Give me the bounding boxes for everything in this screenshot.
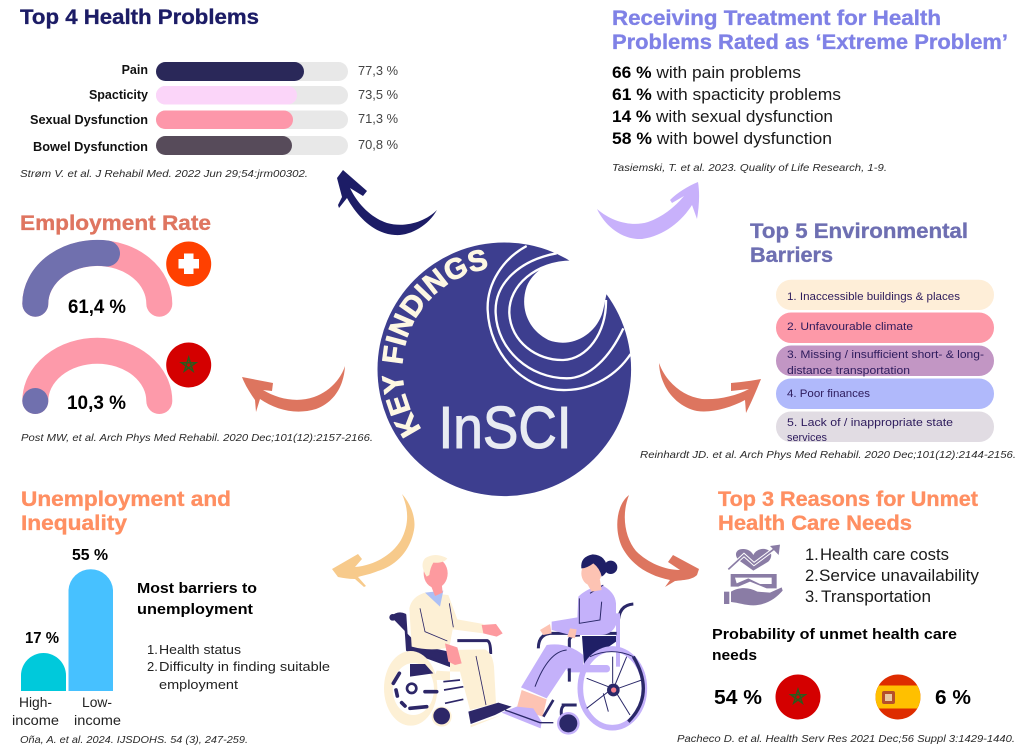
bar: bowel dysfunction [33,136,398,155]
reasons list: Health care costs [820,546,949,564]
heading line 2: Problems Rated as ‘Extreme Problem’ [612,30,1008,54]
axis label: high-income: High- [19,694,52,710]
arrow: lavender to treatment [597,182,699,239]
subheading: most barriers [137,580,257,618]
gauge: Morocco 10,3 % [22,351,159,414]
gauge: Switzerland 61,4 % [35,253,159,318]
citation: Ona: Oña, A. et al. 2024. IJSDOHS. 54 (3), 247-259. [20,734,248,746]
heading: top 4 health problems: Top 4 Health Problems [20,5,259,29]
barrier list: employment [159,677,238,692]
panel: employment rate [20,211,373,444]
reasons list: 2. [805,567,819,585]
woman in wheelchair [502,554,644,735]
barrier 4: 4. Poor finances [787,388,871,400]
bar chart: income [12,547,121,728]
treatment list [612,64,841,148]
citation: Pacheco: Pacheco D. et al. Health Serv Res 2021 Dec;56 Suppl 3:1429-1440. [677,733,1015,745]
barrier list: 2. [147,659,158,674]
barrier 3: distance transportation [787,365,910,377]
subheading: probability: Probability of unmet health care [712,627,957,643]
treatment list: 61 % with spacticity problems [612,86,841,104]
reasons list: Transportation [821,588,931,606]
heading line 2: Inequality [21,511,127,535]
barrier 3: 3. Missing / insufficient short- & long- [787,349,984,361]
panel: top 5 environmental barriers [640,219,1016,461]
axis label: high-income: income [12,712,59,728]
barrier list: Health status [159,642,242,657]
reasons list: 1. [805,546,819,564]
value: 17 %: 17 % [25,630,59,647]
barrier 2: 2. Unfavourable climate [787,321,913,333]
subheading: most barriers: unemployment [137,601,253,618]
barrier list: Difficulty in finding suitable [159,659,330,674]
citation: Post: Post MW, et al. Arch Phys Med Rehabil. 2020 Dec;101(12):2157-2166. [21,432,373,444]
panel: unmet health care needs [677,487,1015,745]
bar: bowel dysfunction: Bowel Dysfunction [33,140,148,154]
arrow: salmon to barriers [659,363,761,413]
axis label: low-income: Low- [82,694,112,710]
bar: high-income [21,653,66,691]
bar chart: health problems [30,62,398,155]
heading line 2: Barriers [750,243,833,267]
bar: sexual dysfunction: 71,3 % [358,112,398,126]
barrier list [147,642,330,692]
barrier 2 [776,312,994,343]
barrier 1 [776,280,994,310]
panel: unemployment and inequality [12,487,330,746]
reasons list: 3. [805,588,819,606]
reasons list: Service unavailability [819,567,980,585]
heading: receiving treatment: Receiving Treatment for Health [612,6,941,30]
bar: low-income [68,569,113,691]
barrier 4 [776,378,994,409]
logo disc [378,242,631,496]
arrow: salmon to unmet needs [617,495,699,587]
gauge: Morocco 10,3 %: 10,3 % [67,393,126,414]
bar: sexual dysfunction: Sexual Dysfunction [30,113,148,127]
bar: spacticity: 73,5 % [358,88,398,102]
icon: Swiss flag [166,242,211,286]
heading line 2: Health Care Needs [718,511,912,535]
heading: environmental barriers: Top 5 Environmental [750,219,968,243]
value: 55 %: 55 % [72,547,108,564]
bar: bowel dysfunction: 70,8 % [358,138,398,152]
curved text path [402,267,530,429]
central logo: InSCI key findings [378,242,632,496]
value: Morocco 54 %: 54 % [714,687,762,709]
logo swirl [488,243,633,390]
bar: spacticity: Spacticity [89,88,148,102]
icon: heart and hand with money [724,545,783,605]
citation: Tasiemski: Tasiemski, T. et al. 2023. Quality of Life Research, 1-9. [612,162,887,174]
barrier 5: 5. Lack of / inappropriate state [787,417,953,429]
barrier 3 [776,346,994,377]
gauge: Switzerland 61,4 %: 61,4 % [68,297,126,318]
icon: Spanish flag [876,674,920,720]
barrier 1: 1. Inaccessible buildings & places [787,291,961,303]
bar: pain: Pain [122,63,148,77]
citation: Strom: Strøm V. et al. J Rehabil Med. 2022 Jun 29;54:jrm00302. [20,168,308,180]
bar: spacticity [89,86,398,104]
arrow: navy to health problems [337,170,437,235]
man in wheelchair [384,555,512,727]
citation: Reinhardt: Reinhardt JD. et al. Arch Phys Med Rehabil. 2020 Dec;101(12):2144-2156. [640,449,1016,461]
axis label: low-income [74,694,121,728]
wordmark: InSCI: InSCI [438,395,572,461]
bar: pain [122,62,398,81]
heading: unemployment: Unemployment and [21,487,231,511]
reasons list [805,546,980,606]
axis label: low-income: income [74,712,121,728]
value: Spain 6 %: 6 % [935,687,971,709]
subheading: most barriers: Most barriers to [137,580,257,597]
curved label: key findings: KEY FINDINGS [382,250,488,438]
panel: receiving treatment [612,6,1008,174]
axis label: high-income [12,694,59,728]
arrow: orange to unemployment [332,494,414,587]
bar: sexual dysfunction [30,110,398,129]
illustration: two wheelchair users [384,554,644,735]
treatment list: 14 % with sexual dysfunction [612,108,833,126]
barrier 5 [776,412,994,444]
icon: Moroccan flag [776,674,820,720]
icon: Moroccan flag [166,342,211,388]
bar: pain: 77,3 % [358,64,398,78]
barrier 5: services [787,432,827,444]
panel: top 4 health problems [20,5,398,180]
arrow: salmon to employment [242,366,345,412]
heading: employment rate: Employment Rate [20,211,211,235]
treatment list: 58 % with bowel dysfunction [612,130,832,148]
treatment list: 66 % with pain problems [612,64,801,82]
subheading: probability: needs [712,648,757,664]
barrier list: 1. [147,642,158,657]
heading: top 3 reasons: Top 3 Reasons for Unmet [718,487,978,511]
subheading: probability [712,627,957,664]
